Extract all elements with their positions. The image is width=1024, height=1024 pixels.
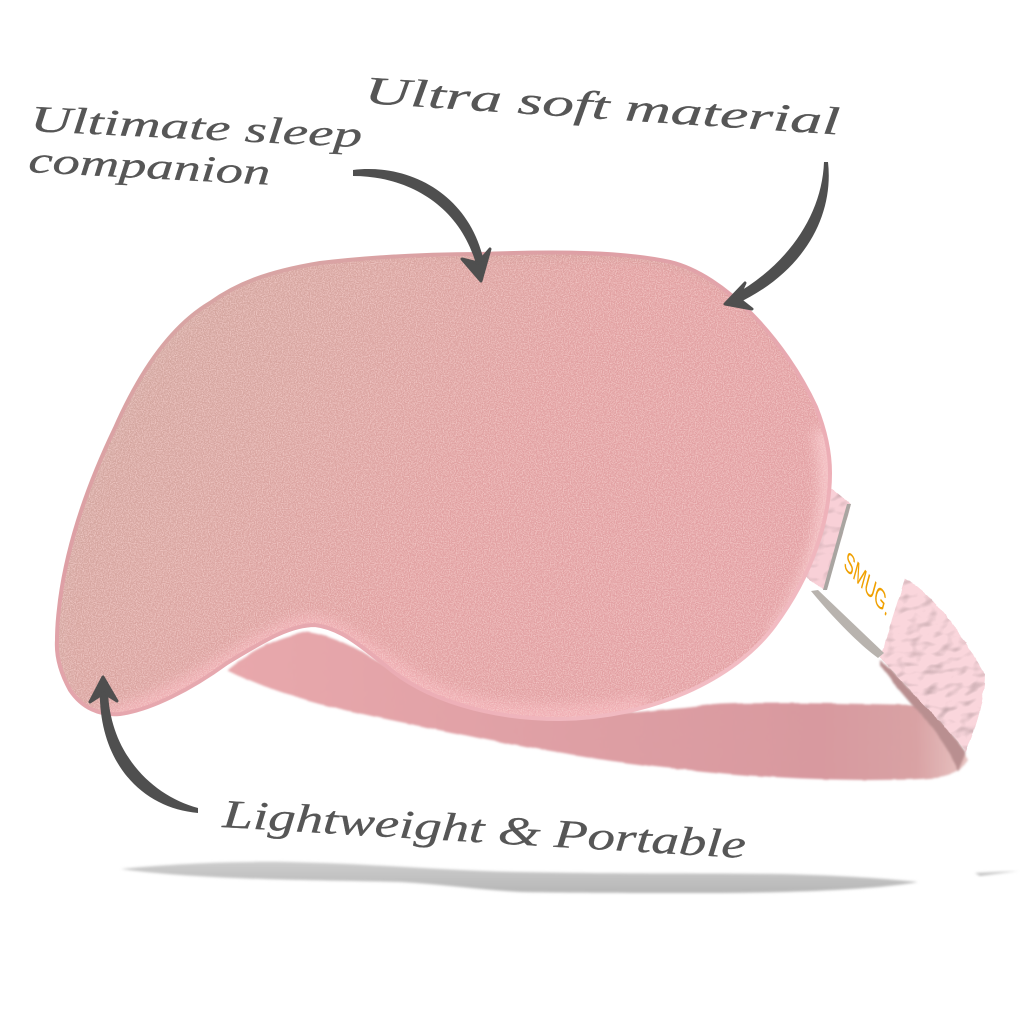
mask: woven texture (50, 245, 840, 725)
mask: face fabric (58, 254, 828, 717)
label: ultimate sleep companion: companion (28, 140, 271, 194)
arrow: to mask top (353, 169, 490, 281)
buckle: white tag (818, 505, 905, 657)
sleep mask body (40, 240, 850, 735)
label: ultimate sleep companion: Ultimate sleep (30, 99, 363, 156)
strap: near buckle segment (804, 487, 851, 590)
label: lightweight and portable: Lightweight & Portable (220, 791, 747, 867)
arrow: to mask corner (725, 162, 829, 309)
strap: front end (880, 578, 985, 752)
strap: inner fold shadow (880, 660, 966, 772)
label: ultra soft material: Ultra soft material (363, 69, 841, 144)
label: ultimate sleep companion (28, 99, 363, 194)
strap: back section (228, 632, 968, 780)
brand label: SMUG. (842, 544, 893, 622)
ground shadow (121, 862, 1018, 893)
mask: piping (57, 253, 830, 719)
arrow: to mask lower left (90, 677, 198, 813)
elastic strap (228, 487, 985, 780)
